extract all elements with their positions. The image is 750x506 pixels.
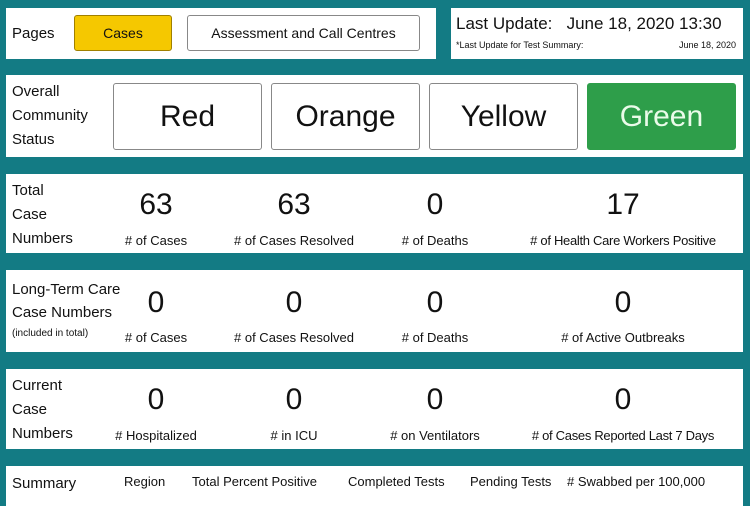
panel: pages — [6, 8, 436, 59]
stat: resolved: # of Cases Resolved — [234, 330, 354, 345]
stat: hospitalized: 0 — [148, 383, 164, 416]
note: (included in total) — [12, 328, 88, 339]
stat: icu — [270, 383, 317, 443]
panel: last update — [451, 8, 743, 59]
panel: long-term care — [6, 270, 743, 352]
stat: health care workers — [530, 188, 716, 248]
stat: deaths: # of Deaths — [402, 233, 468, 248]
label: Long-Term Care — [12, 281, 120, 298]
stat: last 7 days: 0 — [615, 383, 631, 416]
stat: icu: 0 — [286, 383, 302, 416]
stat: resolved: 0 — [286, 286, 302, 319]
stat: resolved: # of Cases Resolved — [234, 233, 354, 248]
status label — [12, 83, 88, 148]
status: yellow: Yellow — [461, 100, 546, 133]
stat: cases: # of Cases — [125, 330, 187, 345]
summary column headers: Pending Tests — [470, 474, 551, 489]
status: green — [587, 83, 736, 150]
label — [12, 281, 120, 321]
stat: cases — [124, 286, 187, 345]
test summary update: June 18, 2020 — [679, 40, 736, 50]
pages label: Pages — [12, 25, 55, 42]
panel: community status — [6, 75, 743, 157]
status label: Status — [12, 131, 55, 148]
status: green: Green — [620, 100, 703, 133]
stat: cases: 0 — [148, 286, 164, 319]
stat: cases — [124, 188, 187, 248]
stat: ventilators — [390, 383, 480, 443]
label: Total — [12, 182, 44, 199]
status: orange — [271, 83, 420, 150]
summary column headers: Region — [124, 474, 165, 489]
stat: ventilators: 0 — [427, 383, 443, 416]
button: cases: Cases — [103, 25, 143, 41]
stat: resolved — [234, 286, 354, 345]
status: yellow — [429, 83, 578, 150]
label — [12, 377, 73, 442]
button: assessment — [187, 15, 420, 51]
stat: resolved: 63 — [277, 188, 311, 221]
stat: last 7 days: # of Cases Reported Last 7 Days — [532, 428, 714, 443]
stat: deaths — [402, 188, 468, 248]
stat: hospitalized — [115, 383, 197, 443]
status: red — [113, 83, 262, 150]
button: assessment: Assessment and Call Centres — [211, 25, 396, 41]
status: orange: Orange — [295, 100, 396, 133]
status: red: Red — [160, 100, 215, 133]
stat: cases: 63 — [139, 188, 173, 221]
stat: icu: # in ICU — [271, 428, 317, 443]
summary label: Summary — [12, 475, 76, 492]
stat: outbreaks: # of Active Outbreaks — [561, 330, 685, 345]
stat: deaths: # of Deaths — [402, 330, 468, 345]
stat: outbreaks — [561, 286, 685, 345]
summary column headers: # Swabbed per 100,000 — [567, 474, 705, 489]
stat: deaths — [402, 286, 468, 345]
panel: current case numbers — [6, 369, 743, 449]
stat: outbreaks: 0 — [615, 286, 631, 319]
summary column headers: Completed Tests — [348, 474, 445, 489]
test summary update — [456, 40, 736, 50]
label: Case — [12, 206, 47, 223]
summary column headers — [124, 474, 705, 489]
stat: resolved — [234, 188, 354, 248]
stat: hospitalized: # Hospitalized — [115, 428, 197, 443]
label — [12, 182, 73, 247]
status label: Overall — [12, 83, 60, 100]
stat: cases: # of Cases — [125, 233, 187, 248]
stat: deaths: 0 — [427, 188, 443, 221]
label: Numbers — [12, 230, 73, 247]
label: Numbers — [12, 425, 73, 442]
panel: total case numbers — [6, 174, 743, 253]
label: Case Numbers — [12, 304, 112, 321]
button: cases — [74, 15, 172, 51]
stat: ventilators: # on Ventilators — [390, 428, 480, 443]
label: Current — [12, 377, 62, 394]
panel: summary — [6, 466, 743, 506]
stat: health care workers: 17 — [606, 188, 640, 221]
stat: health care workers: # of Health Care Workers Positive — [530, 233, 716, 248]
stat: deaths: 0 — [427, 286, 443, 319]
stat: last 7 days — [532, 383, 714, 443]
status label: Community — [12, 107, 88, 124]
summary column headers: Total Percent Positive — [192, 474, 317, 489]
test summary update: *Last Update for Test Summary: — [456, 40, 583, 50]
last update text: Last Update: June 18, 2020 13:30 — [456, 14, 722, 33]
label: Case — [12, 401, 47, 418]
